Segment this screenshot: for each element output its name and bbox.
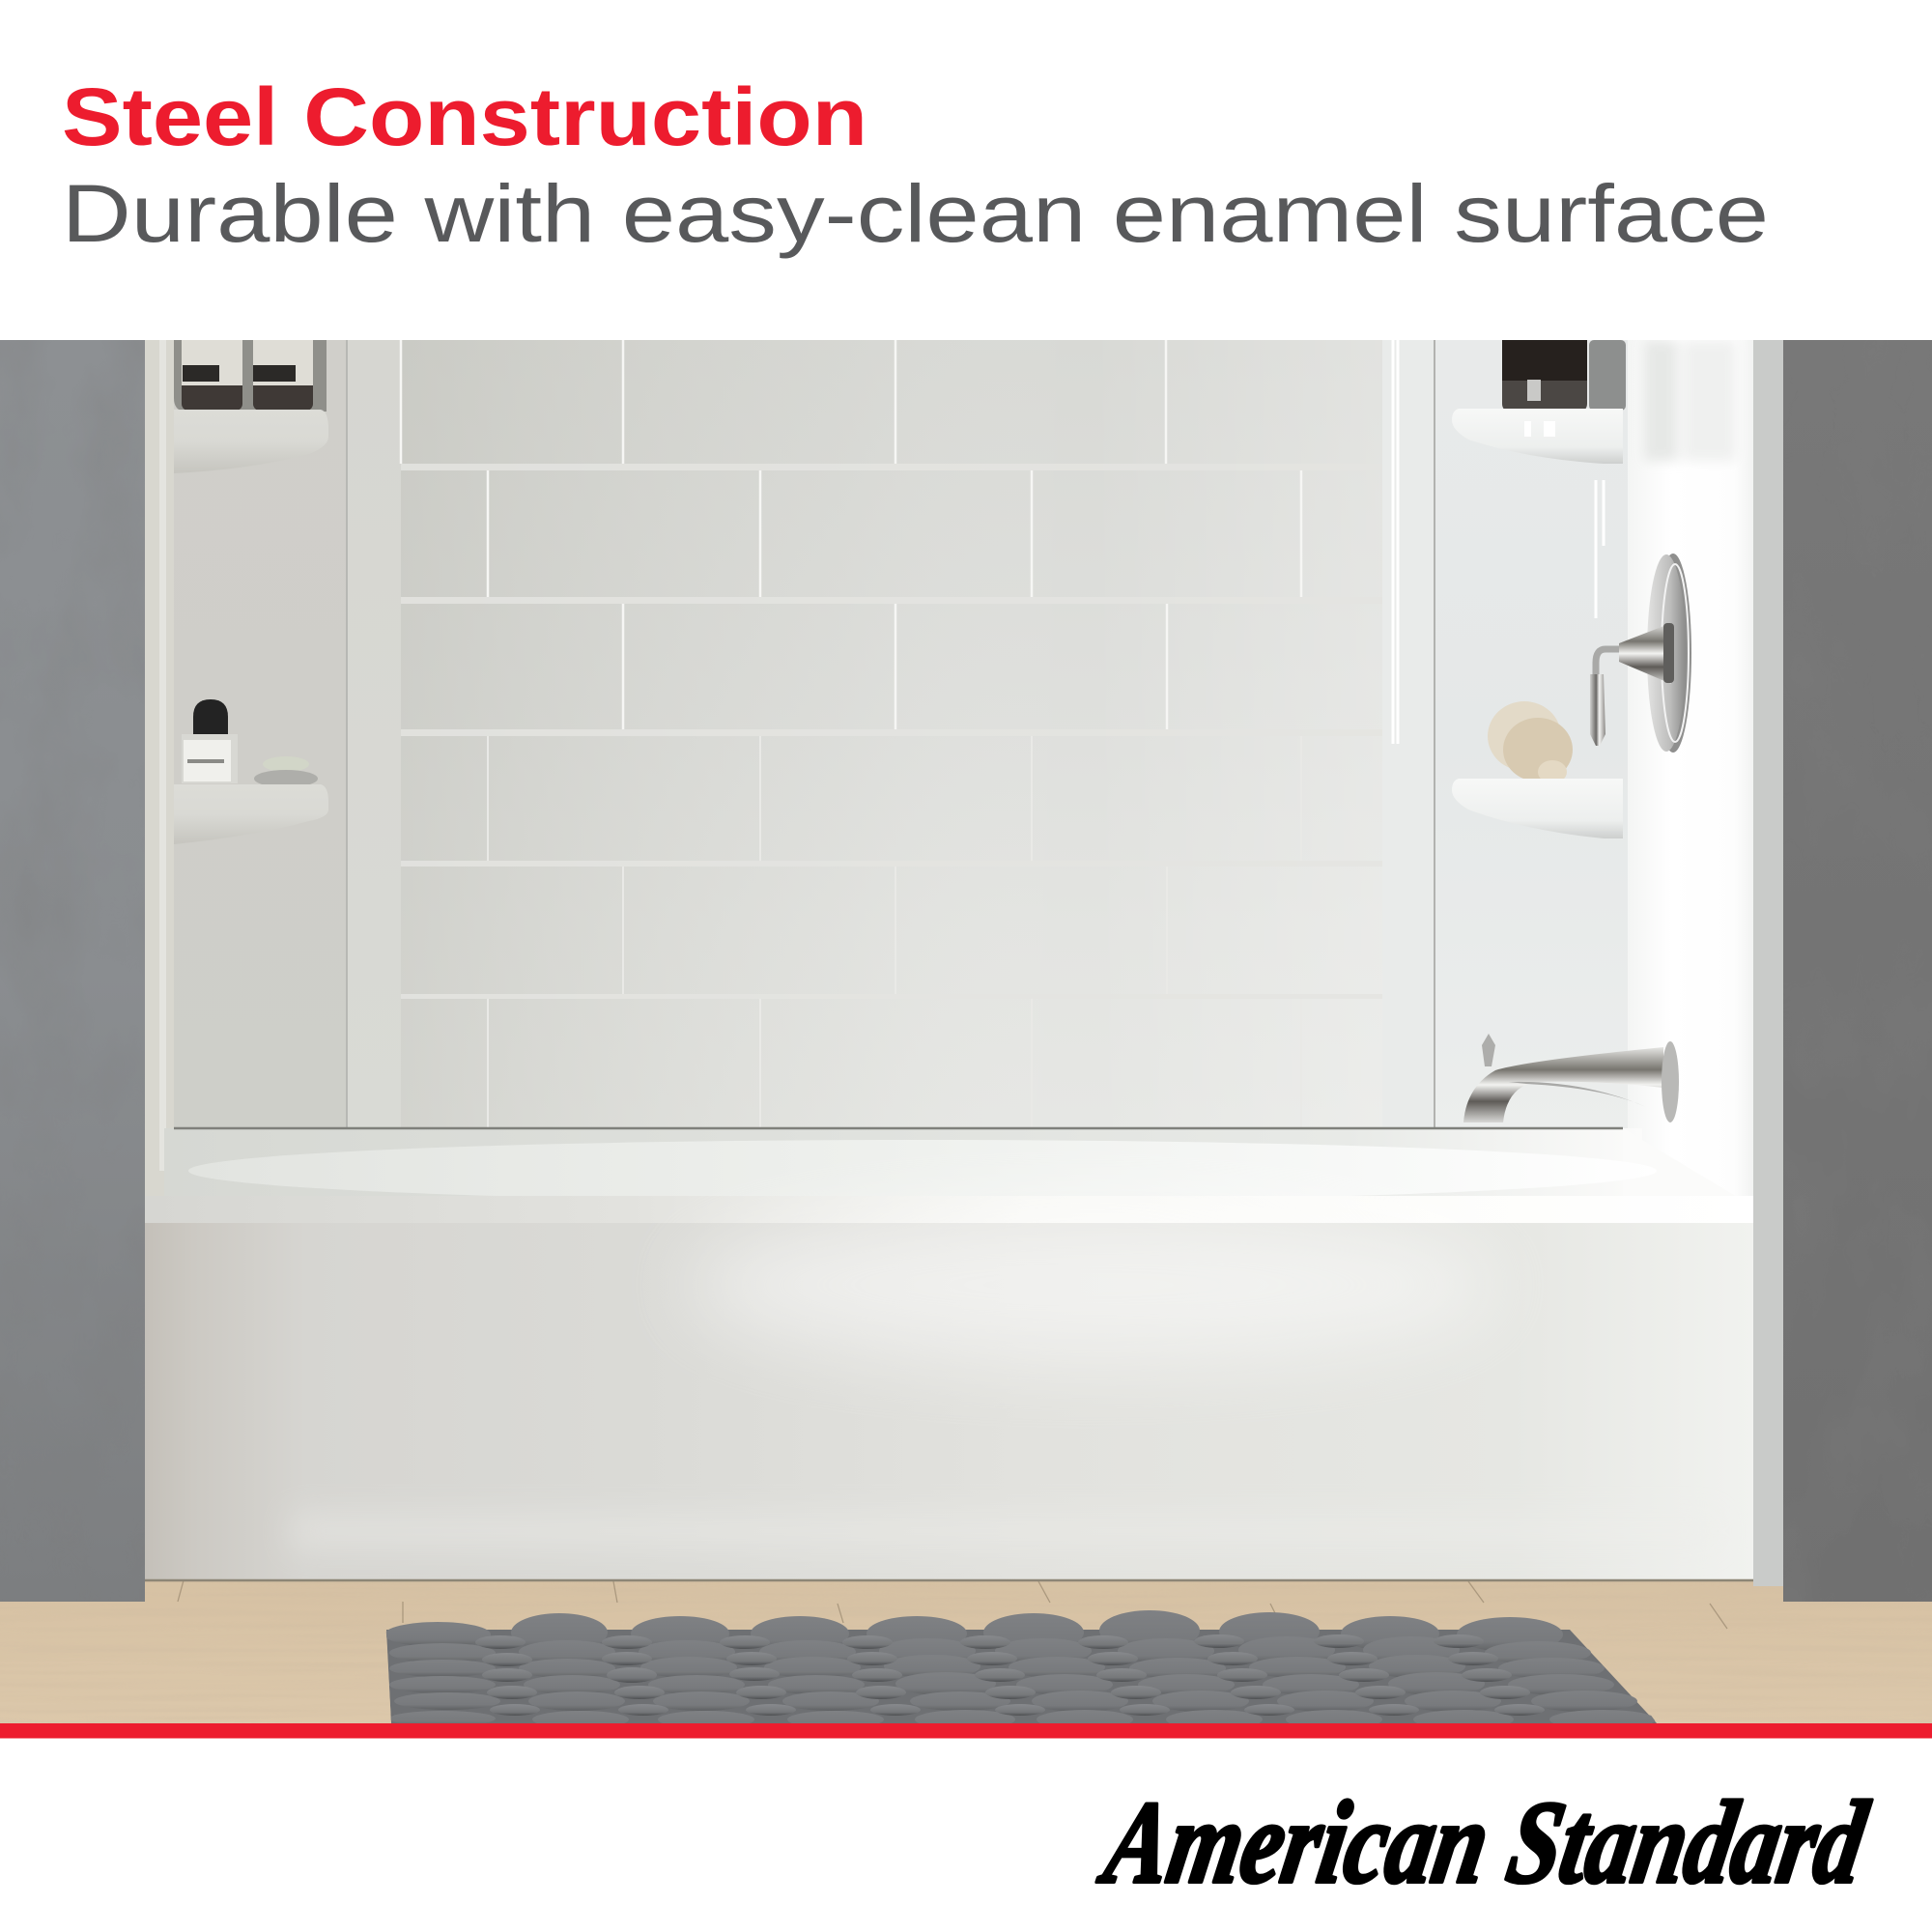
left wall mottling	[0, 340, 145, 1602]
column highlights	[1393, 340, 1398, 744]
left upper shelf	[174, 410, 328, 473]
shelf reflections	[1524, 421, 1555, 437]
right lower shelf	[1452, 779, 1623, 838]
left perfume bottle	[182, 699, 238, 783]
right column	[1382, 340, 1435, 1130]
heading: Steel Construction: Steel Construction	[62, 71, 867, 162]
left trim	[145, 340, 174, 1200]
right upper shelf	[1452, 409, 1623, 464]
grout lines: horizontal	[401, 464, 1119, 999]
shower valve trim plate	[1647, 554, 1691, 753]
right side wall	[1628, 340, 1753, 1198]
apron base highlight	[290, 1512, 1719, 1550]
right wall mottling	[1783, 340, 1932, 1602]
small pebbles	[475, 1634, 1545, 1716]
tub top band	[145, 1196, 1753, 1223]
red divider band	[0, 1723, 1932, 1739]
shower valve handle	[1590, 623, 1674, 746]
floor: light wood planks	[0, 1575, 1932, 1729]
bath mat with pebble pattern	[384, 1610, 1658, 1729]
right grey return strip	[1753, 340, 1783, 1586]
photo: steel bathtub with tile wall surround	[0, 340, 1932, 1729]
large pebbles	[384, 1610, 1656, 1729]
left upper niche with bottles	[174, 340, 327, 412]
tub rim	[164, 1128, 1642, 1198]
right alcove highlights	[1596, 480, 1604, 618]
apron light glow	[686, 1208, 1497, 1362]
left trim highlight	[159, 340, 166, 1171]
tile field	[401, 340, 1382, 1128]
right bottle	[1502, 340, 1587, 412]
tub bowl	[188, 1140, 1657, 1202]
brush	[1488, 701, 1573, 783]
apron base shadow	[145, 1579, 1753, 1581]
alcove seams	[347, 340, 1435, 1130]
bottle left	[182, 340, 242, 411]
right upper niche	[1589, 340, 1626, 411]
bottle right	[253, 340, 313, 411]
right alcove	[1435, 340, 1628, 1142]
left column	[348, 340, 401, 1130]
subheading: durable enamel surface: Durable with easy-clean enamel surface	[62, 168, 1769, 259]
bath spout	[1463, 1034, 1679, 1122]
right concrete wall	[1783, 340, 1932, 1602]
grout lines: vertical faint	[487, 736, 1033, 1127]
tub deck to right wall	[1623, 1128, 1739, 1198]
left lower shelf	[174, 784, 328, 844]
side wall upper tiles	[1644, 340, 1736, 461]
tub apron	[145, 1196, 1753, 1580]
left alcove	[174, 340, 346, 1130]
left concrete wall	[0, 340, 145, 1602]
grout lines: vertical bright	[401, 340, 1301, 729]
rim shadow line	[174, 1127, 1623, 1129]
soap and dish	[254, 770, 318, 784]
